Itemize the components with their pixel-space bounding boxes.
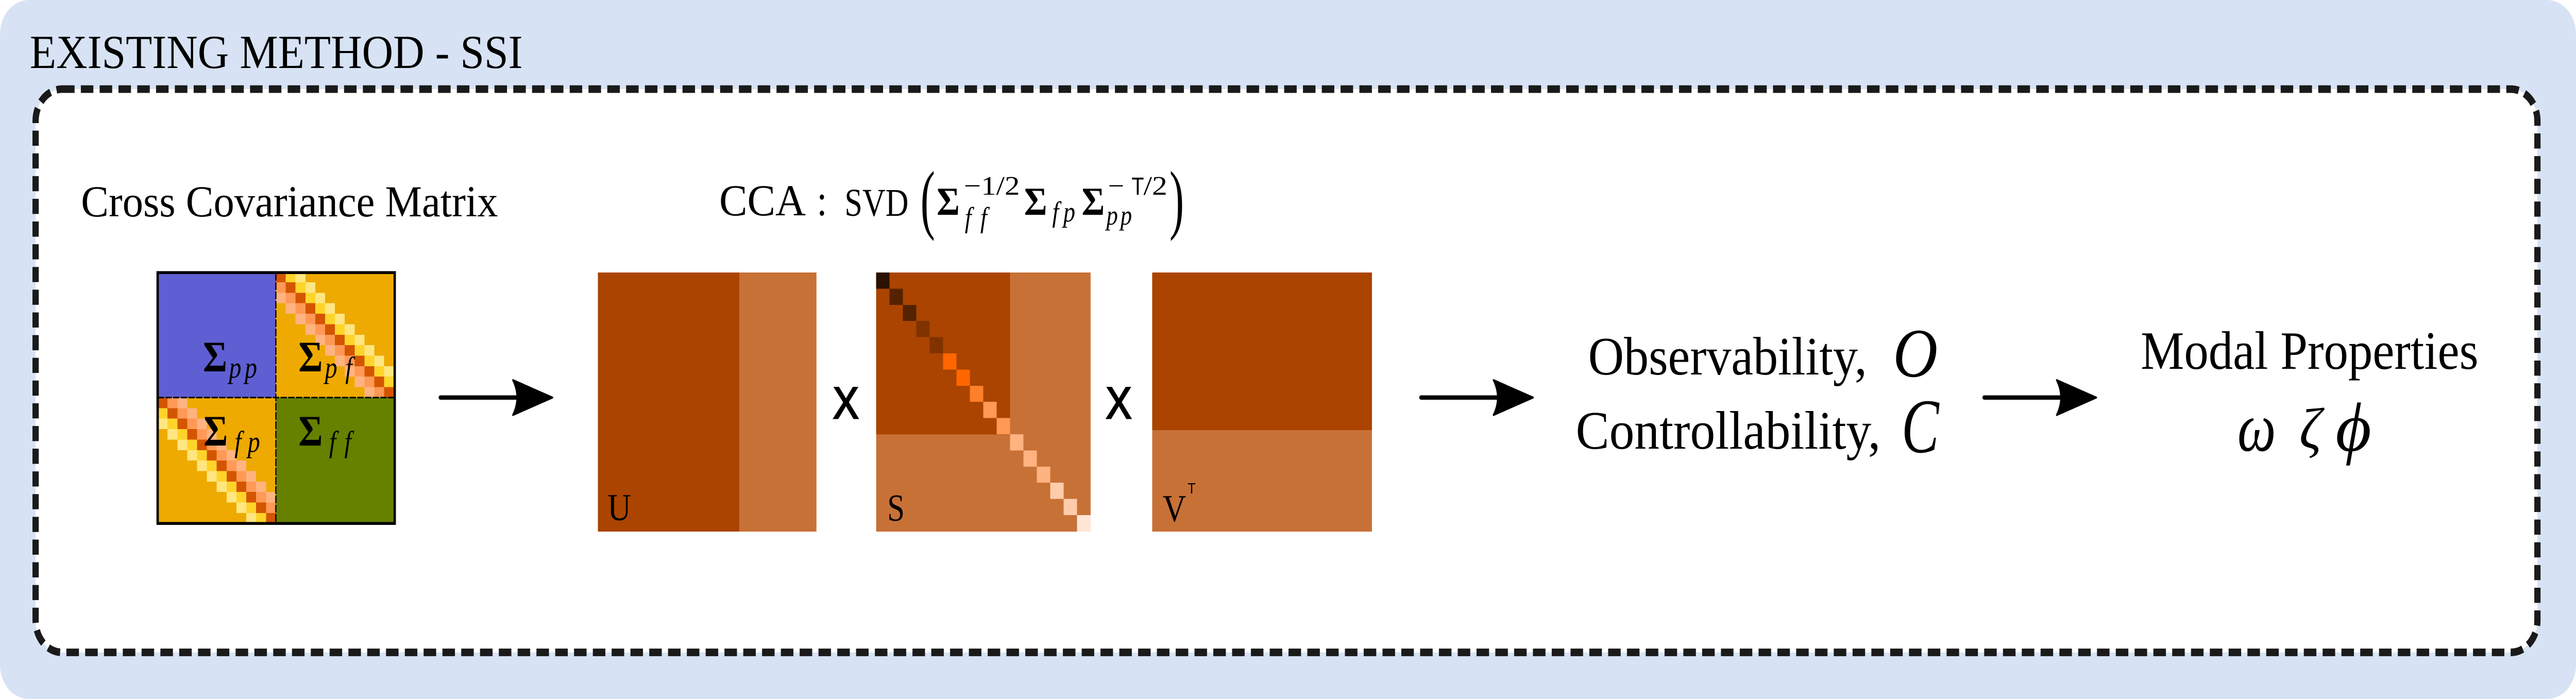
chart: S matrix	[876, 272, 1091, 532]
heading: CCA SVD equation: fp	[1052, 196, 1075, 228]
arrow: decomposition to state-space	[1421, 380, 1533, 415]
heading: CCA SVD equation: T	[1131, 173, 1144, 200]
heading: CCA SVD equation: −1/2	[964, 171, 1020, 201]
label: sigma pf	[298, 332, 355, 384]
text: observability: Observability,	[1588, 326, 1867, 386]
heading: CCA SVD equation: (	[921, 156, 935, 242]
heading: cross covariance matrix: Cross Covariance Matrix	[81, 178, 498, 227]
heading: CCA SVD equation: Σ	[937, 180, 960, 224]
symbols: omega zeta phi	[2238, 389, 2371, 466]
label: sigma ff: Σ	[298, 406, 323, 455]
heading: modal properties: Modal Properties	[2141, 320, 2478, 381]
label: V transpose	[1163, 480, 1196, 530]
panel: dashed white container	[36, 89, 2537, 652]
label: sigma fp: Σ	[204, 406, 228, 455]
label: sigma pp: pp	[227, 351, 257, 384]
label: sigma ff: ff	[329, 425, 354, 458]
text: controllability	[1576, 383, 1940, 469]
matrix frame	[158, 272, 395, 523]
heading: CCA SVD equation: :	[817, 177, 827, 226]
label: V transpose: T	[1188, 480, 1196, 497]
block: sigma pp	[158, 273, 276, 398]
chart: cross covariance block matrix	[158, 272, 395, 524]
label: sigma pp: Σ	[203, 332, 227, 381]
label: sigma pf: pf	[323, 351, 355, 384]
text: controllability: C	[1902, 383, 1940, 469]
label: sigma pf: Σ	[298, 332, 323, 381]
singular value diagonal	[876, 272, 1091, 532]
label: sigma fp: fp	[234, 425, 260, 458]
multiply sign 1: X	[833, 379, 859, 428]
text: observability: O	[1893, 315, 1938, 391]
block: sigma ff	[276, 398, 395, 524]
heading: CCA SVD equation: Σ	[1081, 180, 1105, 224]
arrow: state-space to modal properties	[1984, 380, 2096, 415]
symbols: omega zeta phi: ω	[2238, 389, 2276, 466]
heading: CCA SVD equation: CCA	[719, 177, 806, 226]
heading: CCA SVD equation: SVD	[844, 182, 908, 225]
block: sigma fp	[158, 398, 276, 524]
symbols: omega zeta phi: ζ	[2299, 397, 2325, 461]
label: S: S	[887, 487, 905, 529]
heading: CCA SVD equation: pp	[1105, 200, 1132, 231]
text: observability	[1588, 315, 1938, 391]
heading: CCA SVD equation: Σ	[1024, 180, 1047, 224]
chart: U matrix	[598, 272, 817, 532]
label: V transpose: V	[1163, 487, 1186, 530]
title: EXISTING METHOD - SSI	[30, 26, 523, 79]
chart: V transpose matrix	[1152, 272, 1372, 532]
label: sigma pp	[203, 332, 257, 384]
label: sigma fp	[204, 406, 260, 458]
heading: CCA SVD equation: ff	[965, 202, 990, 234]
heading: CCA SVD equation	[719, 156, 1184, 242]
label: U: U	[607, 486, 631, 528]
symbols: omega zeta phi: ϕ	[2335, 389, 2371, 466]
quadrant dashed dividers	[158, 273, 395, 524]
text: controllability: Controllability,	[1576, 400, 1880, 461]
heading: CCA SVD equation: −	[1108, 171, 1124, 201]
heading: CCA SVD equation: )	[1170, 156, 1184, 242]
label: sigma ff	[298, 406, 354, 458]
heading: CCA SVD equation: /2	[1143, 171, 1167, 201]
arrow: matrix to CCA	[440, 380, 552, 415]
multiply sign 2: X	[1106, 379, 1131, 428]
block: sigma pf	[276, 272, 395, 398]
